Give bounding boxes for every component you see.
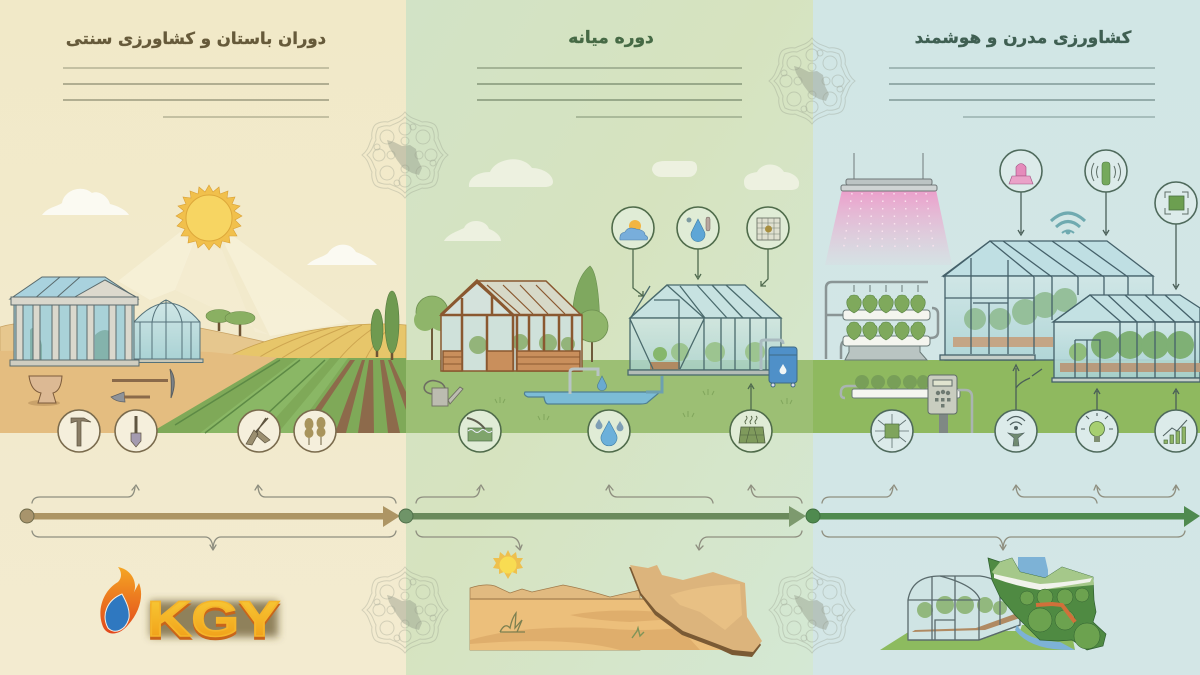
panel: modern era background (813, 0, 1200, 675)
water pond and pipe (524, 369, 662, 404)
cloud (444, 221, 501, 241)
arrow: sensor up with branch (1013, 365, 1042, 410)
medallion: upper middle-modern border (769, 38, 855, 124)
brackets: modern era upper left (822, 485, 897, 503)
arrow: chart upward (1173, 389, 1179, 410)
timeline: ancient era arrow (20, 506, 400, 527)
sun (176, 185, 242, 250)
wifi signal (1051, 213, 1085, 234)
brackets: ancient era upper right (255, 485, 396, 503)
icon: wheat (294, 410, 336, 452)
temple greenhouse (10, 277, 139, 366)
pickaxe (112, 369, 174, 398)
shovel (111, 392, 150, 402)
icon: hydroponic soil (459, 410, 501, 452)
arrow: camera to greenhouse (1173, 224, 1179, 289)
arrow: weather to greenhouse (633, 249, 643, 296)
arrow: alarm to greenhouse (1018, 192, 1024, 235)
icon: camera frame (1155, 182, 1197, 224)
icon: alarm beacon (1000, 150, 1042, 192)
ground (813, 360, 1200, 433)
tree pair (206, 310, 255, 336)
large smart greenhouse (940, 241, 1153, 360)
watering can (424, 381, 463, 406)
illustration: hoop greenhouse (908, 576, 1020, 640)
logo wordmark depth: KGY (147, 594, 280, 650)
controller unit (928, 375, 957, 433)
brackets: modern era upper center (1013, 485, 1097, 503)
logo: KGY (100, 567, 280, 650)
cloud (42, 189, 129, 215)
icon: shears (238, 410, 280, 452)
panel: middle era background (406, 0, 813, 675)
text placeholder lines: ancient (63, 68, 329, 117)
illustration: dry Iran map (629, 565, 762, 657)
small desert plant (632, 628, 644, 638)
icon: light bulb (1076, 410, 1118, 452)
hills (0, 323, 290, 360)
medallion: upper ancient-middle border (362, 112, 448, 198)
brackets: middle era upper center (606, 485, 713, 503)
icon: water drops (588, 410, 630, 452)
crop field (155, 358, 406, 433)
title: modern era: کشاورزی مدرن و هوشمند (915, 27, 1132, 48)
icon: hammer (58, 410, 100, 452)
brackets: middle era upper left (416, 485, 484, 503)
brackets: middle era upper right (748, 485, 802, 503)
vertical hydroponic rack (826, 282, 938, 360)
brackets: middle era lower right (696, 531, 802, 550)
icon: water drop and thermometer (677, 207, 719, 249)
brackets: modern era lower (822, 531, 1185, 550)
ground (406, 360, 813, 433)
scene: middle era landscape (406, 159, 813, 452)
small sun (493, 550, 523, 579)
desert plant (500, 613, 525, 632)
cloud (307, 245, 377, 265)
scene: modern era landscape (813, 150, 1200, 452)
icon: growth chart (1155, 410, 1197, 452)
title: ancient era: دوران باستان و کشاورزی سنتی (66, 29, 326, 49)
glass greenhouse (628, 285, 781, 375)
title: middle era: دوره میانه (568, 28, 654, 48)
logo flame and drop (100, 567, 141, 634)
icon: sun and cloud (612, 207, 654, 249)
cloud (744, 164, 799, 190)
text placeholder lines: modern (889, 68, 1155, 117)
icon: wireless sensor (1085, 150, 1127, 192)
trees behind wooden greenhouse (414, 266, 608, 362)
timeline: modern era arrow (806, 506, 1200, 527)
cloud (652, 161, 697, 177)
illustration: lush Iran map (988, 557, 1106, 650)
arrow: humidity to greenhouse (695, 249, 701, 279)
icon: spade (115, 410, 157, 452)
clay pot (28, 376, 62, 406)
cloud (469, 159, 553, 187)
yellow wheat hill (226, 324, 406, 360)
arrow: sensor to greenhouse (1103, 192, 1109, 235)
medallion: lower ancient-middle border (362, 567, 448, 653)
wooden greenhouse (441, 281, 582, 371)
icon: smart chip (871, 410, 913, 452)
grass tufts (495, 389, 792, 420)
illustration: arid desert (470, 550, 730, 650)
icon: ventilation fan (747, 207, 789, 249)
illustration: base ground (880, 625, 1075, 650)
sun rays beams (118, 232, 350, 336)
cypress trees (371, 291, 399, 360)
horizontal hydroponic tube (841, 375, 972, 433)
arrow: heating upward (748, 384, 754, 410)
LED grow light (825, 153, 952, 265)
brackets: middle era lower left (416, 531, 522, 550)
arrow: ventilation to greenhouse (761, 249, 768, 286)
arrow: light upward (1094, 389, 1100, 410)
brackets: ancient era upper left (32, 485, 139, 503)
icon: soil heating (730, 410, 772, 452)
timeline: middle era arrow (399, 506, 806, 527)
scene: ancient landscape (0, 185, 406, 452)
text placeholder lines: middle (477, 68, 742, 117)
small smart greenhouse (1052, 295, 1200, 382)
medallion: lower middle-modern border (769, 567, 855, 653)
sand ground (0, 350, 290, 433)
logo wordmark: KGY (147, 591, 280, 647)
brackets: modern era upper right (1094, 485, 1179, 497)
panel: ancient era background (0, 0, 406, 675)
blue water tank (761, 340, 797, 387)
icon: wireless farmer (995, 410, 1037, 452)
brackets: ancient era lower (32, 531, 396, 550)
domed greenhouse (132, 300, 203, 362)
logo wordmark shadow (150, 601, 278, 637)
